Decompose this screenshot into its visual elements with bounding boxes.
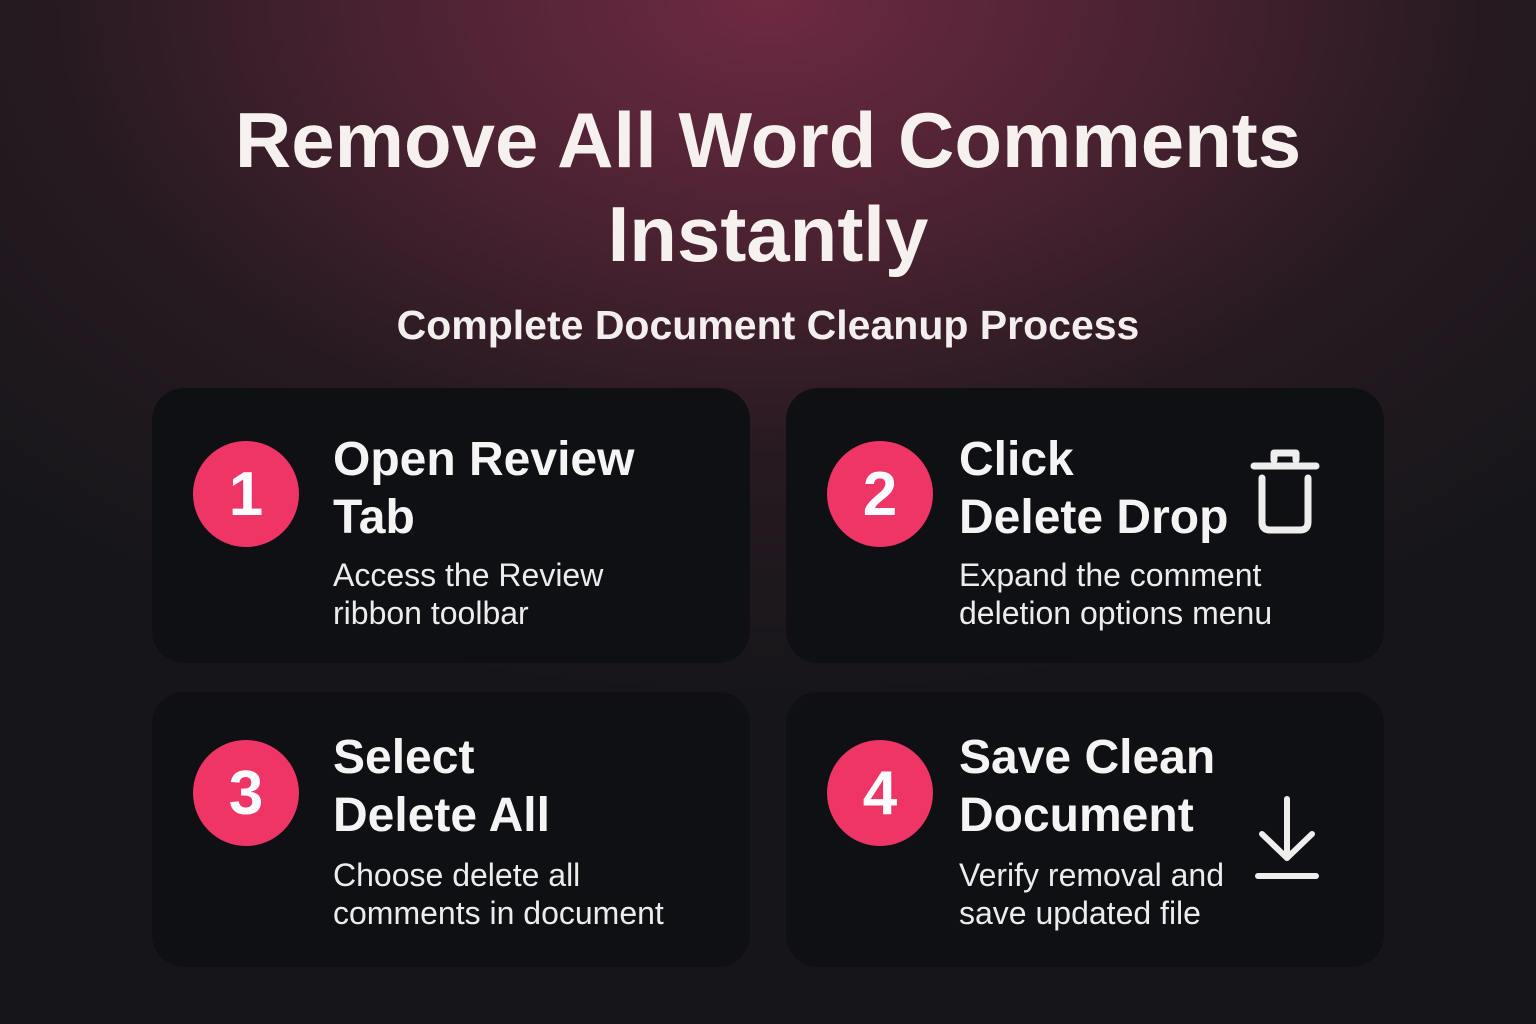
- step number 4: 4: [863, 758, 897, 828]
- icon: trash: [1250, 450, 1320, 534]
- description 4: [959, 857, 1224, 931]
- description 2: Expand the comment: [959, 557, 1261, 593]
- step number 2: [827, 441, 933, 547]
- description 2: deletion options menu: [959, 595, 1272, 631]
- heading 4: [959, 731, 1215, 842]
- heading 4: Document: [959, 789, 1194, 842]
- panel: step 4: [786, 692, 1384, 967]
- description 1: Access the Review: [333, 557, 603, 593]
- description 1: ribbon toolbar: [333, 595, 529, 631]
- heading 4: Save Clean: [959, 731, 1215, 784]
- description 4: Verify removal and: [959, 857, 1224, 893]
- step number 1: [193, 441, 299, 547]
- heading 2: Click: [959, 433, 1074, 486]
- description 1: [333, 557, 604, 631]
- step number 2: 2: [863, 460, 897, 528]
- title: [235, 96, 1301, 278]
- heading 1: Tab: [333, 491, 415, 544]
- heading 3: [333, 731, 550, 842]
- heading 2: Delete Drop: [959, 491, 1228, 544]
- panel: step 3: [152, 692, 750, 967]
- heading 3: Delete All: [333, 789, 550, 842]
- step number 1: 1: [229, 460, 263, 528]
- description 3: Choose delete all: [333, 857, 580, 893]
- description 3: [333, 857, 664, 931]
- heading 3: Select: [333, 731, 474, 784]
- title: Remove All Word Comments: [235, 96, 1301, 184]
- heading 1: Open Review: [333, 433, 634, 486]
- heading 1: [333, 433, 634, 544]
- description 4: save updated file: [959, 895, 1201, 931]
- description 2: [959, 557, 1272, 631]
- title: Instantly: [608, 190, 928, 278]
- step number 3: 3: [229, 758, 263, 828]
- step number 4: [827, 740, 933, 846]
- subtitle: Complete Document Cleanup Process: [397, 302, 1139, 348]
- heading 2: [959, 433, 1228, 544]
- description 3: comments in document: [333, 895, 664, 931]
- panel: step 2: [786, 388, 1384, 663]
- panel: step 1: [152, 388, 750, 663]
- icon: download: [1255, 796, 1319, 879]
- step number 3: [193, 740, 299, 846]
